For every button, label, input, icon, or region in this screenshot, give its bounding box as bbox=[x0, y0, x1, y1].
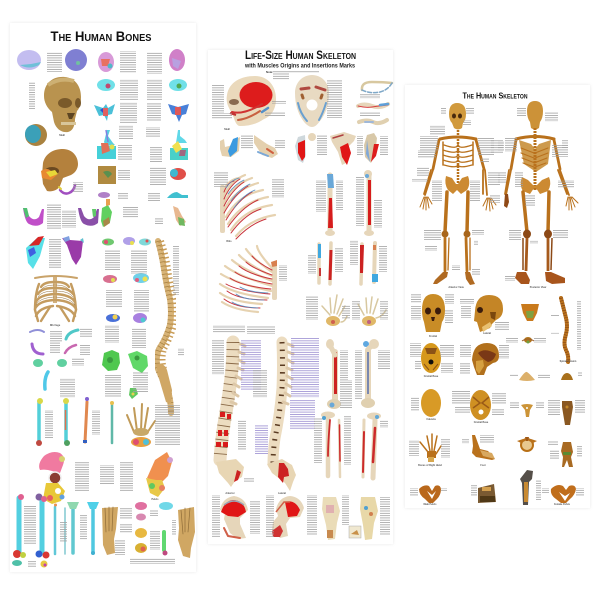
ribs upper bbox=[220, 185, 225, 233]
skull and joint label text blocks bbox=[409, 293, 585, 506]
skull and joint label text blocks: Foot bbox=[480, 464, 486, 467]
bone label text blocks: Rib Cage bbox=[50, 324, 61, 327]
skull and joint label text blocks: Cranial Base bbox=[424, 375, 439, 378]
skull bones illustrations bbox=[17, 49, 189, 198]
note legend bbox=[266, 70, 319, 80]
hands bbox=[322, 295, 347, 322]
muscle mark label text blocks: Skull bbox=[224, 128, 230, 131]
spine right bbox=[273, 342, 282, 464]
skeleton label text blocks: Posterior View bbox=[530, 286, 546, 289]
skeleton label text blocks bbox=[412, 108, 574, 289]
long bones, hand, pelvis, leg and foot bones bbox=[12, 397, 195, 568]
right bone column bbox=[169, 49, 185, 71]
panel: The Human Skeleton poster bbox=[405, 85, 590, 508]
title: The Human Skeleton: The Human Skeleton bbox=[462, 90, 528, 100]
title: The Human Bones: The Human Bones bbox=[50, 28, 152, 44]
skull and joint label text blocks: Calvaria bbox=[426, 418, 436, 421]
muscle mark label text blocks: Anterior bbox=[225, 492, 235, 495]
skull and joint illustrations bbox=[419, 294, 576, 505]
rib cage bbox=[35, 276, 77, 278]
skull and joint label text blocks: Female Pelvis bbox=[554, 503, 571, 506]
skull and joint label text blocks: Lateral bbox=[483, 332, 491, 335]
skull and joint label text blocks: Bones of Right Hand bbox=[418, 464, 442, 467]
skull and joint label text blocks: Frontal bbox=[429, 335, 437, 338]
skeleton: anterior view bbox=[420, 103, 496, 285]
feet bbox=[322, 497, 340, 540]
spine left bbox=[220, 342, 233, 460]
bone label text blocks: Skull bbox=[59, 134, 65, 137]
skeleton label text blocks: Anterior View bbox=[448, 286, 464, 289]
muscle mark label text blocks: Lateral bbox=[278, 492, 286, 495]
lower legs bbox=[326, 418, 330, 476]
panel: The Human Bones poster bbox=[10, 23, 196, 572]
bone label text blocks: Pelvis bbox=[152, 498, 159, 501]
note legend: Note: bbox=[266, 70, 273, 74]
mandibles, vertebrae and trunk bones bbox=[23, 199, 186, 399]
left bone column bbox=[98, 52, 114, 72]
colored vertebrae bbox=[102, 238, 114, 246]
pelvis bones bbox=[220, 496, 248, 539]
ribs lower bbox=[272, 262, 277, 300]
skull and joint label text blocks: Spinal Column bbox=[560, 360, 577, 363]
skull and joint label text blocks: Male Pelvis bbox=[424, 503, 437, 506]
subtitle: with Muscles Origins and Insertions Marks bbox=[244, 62, 355, 70]
muscle mark label text blocks: Ribs bbox=[226, 240, 232, 243]
panel: Life-Size Human Skeleton poster bbox=[208, 50, 393, 544]
skeleton: posterior view bbox=[504, 101, 578, 284]
spine bbox=[156, 241, 175, 413]
muscle mark label text blocks bbox=[212, 80, 390, 537]
arm bones bbox=[328, 175, 332, 230]
title: Life-Size Human Skeleton: Life-Size Human Skeleton bbox=[245, 50, 356, 62]
femurs bbox=[332, 352, 338, 400]
bone label text blocks bbox=[24, 51, 184, 568]
skull and bone illustrations with muscle marks bbox=[216, 75, 392, 540]
skull and joint label text blocks: Cranial Base bbox=[474, 421, 489, 424]
